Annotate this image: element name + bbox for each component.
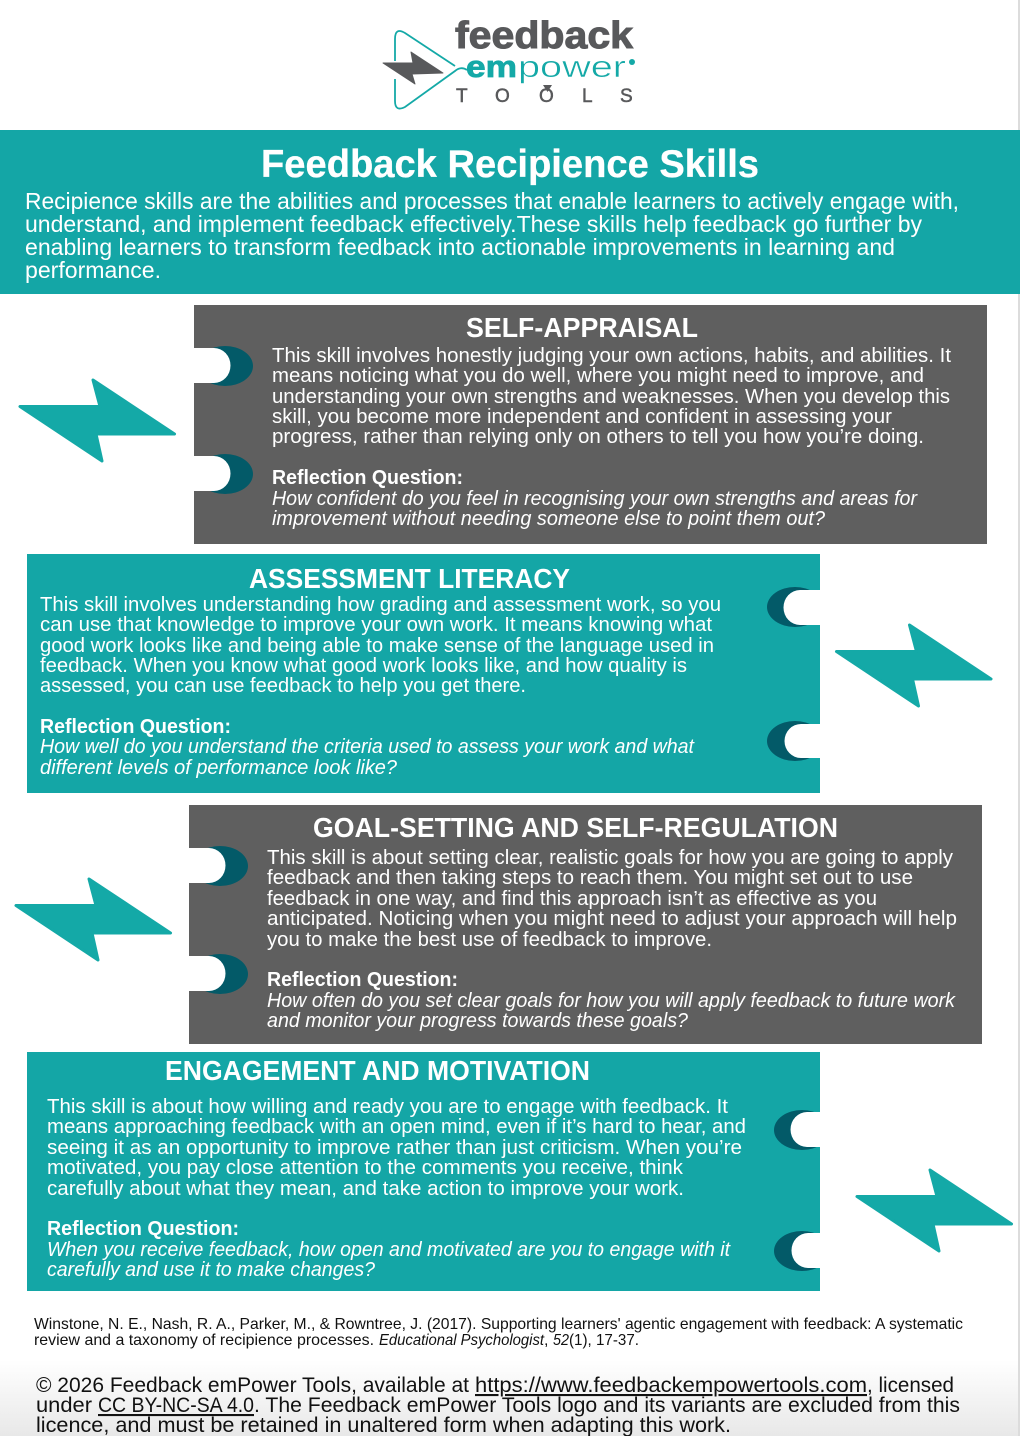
citation: , [544,1332,548,1349]
reflection question: How often do you set clear goals for how you will apply feedback to future work [267,990,956,1012]
binder notch [194,454,253,494]
citation: 52 [553,1332,569,1349]
description [40,594,721,697]
intro paragraph [25,188,959,283]
description: This skill involves honestly judging your own actions, habits, and abilities. It [272,345,951,367]
description: feedback in one way, and find this approach isn’t as effective as you [267,888,877,910]
description [267,847,957,951]
citation [34,1316,963,1349]
binder notch [767,721,825,761]
binder notch [774,1110,832,1150]
panel: goal-setting and self-regulation [189,805,982,1044]
reflection question: Reflection Question: [47,1218,239,1240]
binder notch [767,587,825,627]
binder notch [194,346,253,386]
binder notch [774,1231,832,1271]
description: feedback and then taking steps to reach them. You might set out to use [267,867,913,889]
description: understanding your own strengths and weaknesses. When you develop this [272,386,950,408]
copyright notice: CC BY-NC-SA 4.0 [98,1394,254,1417]
description: can use that knowledge to improve your own work. It means knowing what [40,614,712,636]
citation: review and a taxonomy of recipience processes. [34,1332,374,1349]
description: you to make the best use of feedback to improve. [267,929,712,951]
intro paragraph: performance. [25,257,161,283]
description [272,345,951,448]
heading: SELF-APPRAISAL [466,312,698,343]
reflection question: carefully and use it to make changes? [47,1259,376,1281]
copyright notice [36,1374,960,1436]
icon: lightning bolt 1 [20,380,174,461]
icon: lightning bolt 2 [836,625,991,706]
reflection question [272,467,918,530]
logo: Feedback emPower Tools: feedback [455,15,634,57]
citation: (1), 17-37. [569,1332,639,1349]
panel: engagement and motivation [27,1052,832,1291]
citation: Winstone, N. E., Nash, R. A., Parker, M., & Rowntree, J. (2017). Supporting learners' agentic engagement with feedback: A systematic [34,1316,963,1333]
description: assessed, you can use feedback to help you get there. [40,675,526,697]
panel: assessment literacy [27,554,825,793]
description: This skill is about how willing and ready you are to engage with feedback. It [47,1096,728,1118]
reflection question: How confident do you feel in recognising your own strengths and areas for [272,488,918,510]
intro paragraph: understand, and implement feedback effectively.These skills help feedback go further by [25,211,922,237]
reflection question: Reflection Question: [40,716,231,738]
description: This skill is about setting clear, realistic goals for how you are going to apply [267,847,953,869]
reflection question: Reflection Question: [272,467,463,489]
description: carefully about what they mean, and take action to improve your work. [47,1178,684,1200]
description: motivated, you pay close attention to the comments you receive, think [47,1157,684,1179]
reflection question [267,969,956,1032]
heading: ASSESSMENT LITERACY [249,563,570,594]
description: progress, rather than relying only on others to tell you how you’re doing. [272,426,924,448]
description: This skill involves understanding how grading and assessment work, so you [40,594,721,616]
logo: Feedback emPower Tools: power [518,49,626,84]
reflection question: improvement without needing someone else to point them out? [272,508,826,530]
icon: lightning bolt 3 [16,879,170,960]
description: anticipated. Noticing when you might need to adjust your approach will help [267,908,957,930]
reflection question: and monitor your progress towards these goals? [267,1010,689,1032]
logo: Feedback emPower Tools: TOOLS [456,86,633,107]
description: seeing it as an opportunity to improve rather than just criticism. When you’re [47,1137,742,1159]
icon: lightning bolt 4 [857,1170,1012,1251]
reflection question: How well do you understand the criteria used to assess your work and what [40,736,695,758]
panel: self-appraisal [194,305,987,544]
reflection question: When you receive feedback, how open and motivated are you to engage with it [47,1239,731,1261]
logo: Feedback emPower Tools: em [466,49,517,84]
description: means noticing what you do well, where you might need to improve, and [272,365,924,387]
citation: Educational Psychologist [379,1332,545,1349]
copyright notice: https://www.feedbackempowertools.com [475,1374,867,1397]
header band [0,130,1020,294]
intro paragraph: Recipience skills are the abilities and processes that enable learners to actively engage with, [25,188,959,214]
binder notch [189,954,248,994]
title: Feedback Recipience Skills [261,143,759,186]
heading: GOAL-SETTING AND SELF-REGULATION [313,812,838,843]
description: good work looks like and being able to make sense of the language used in [40,635,714,657]
description [47,1096,746,1200]
reflection question [47,1218,731,1281]
description: skill, you become more independent and confident in assessing your [272,406,892,428]
logo: Feedback emPower Tools [383,15,635,109]
intro paragraph: enabling learners to transform feedback into actionable improvements in learning and [25,234,895,260]
binder notch [189,846,248,886]
description: means approaching feedback with an open mind, even if it’s hard to hear, and [47,1116,746,1138]
copyright notice: © 2026 Feedback emPower Tools, available at [36,1374,469,1397]
copyright notice: . The Feedback emPower Tools logo and its variants are excluded from this [254,1394,960,1417]
reflection question: different levels of performance look like? [40,757,398,779]
reflection question [40,716,695,779]
heading: ENGAGEMENT AND MOTIVATION [165,1055,590,1086]
description: feedback. When you know what good work looks like, and how quality is [40,655,687,677]
copyright notice: under [36,1394,92,1417]
copyright notice: , licensed [867,1374,954,1397]
reflection question: Reflection Question: [267,969,458,991]
